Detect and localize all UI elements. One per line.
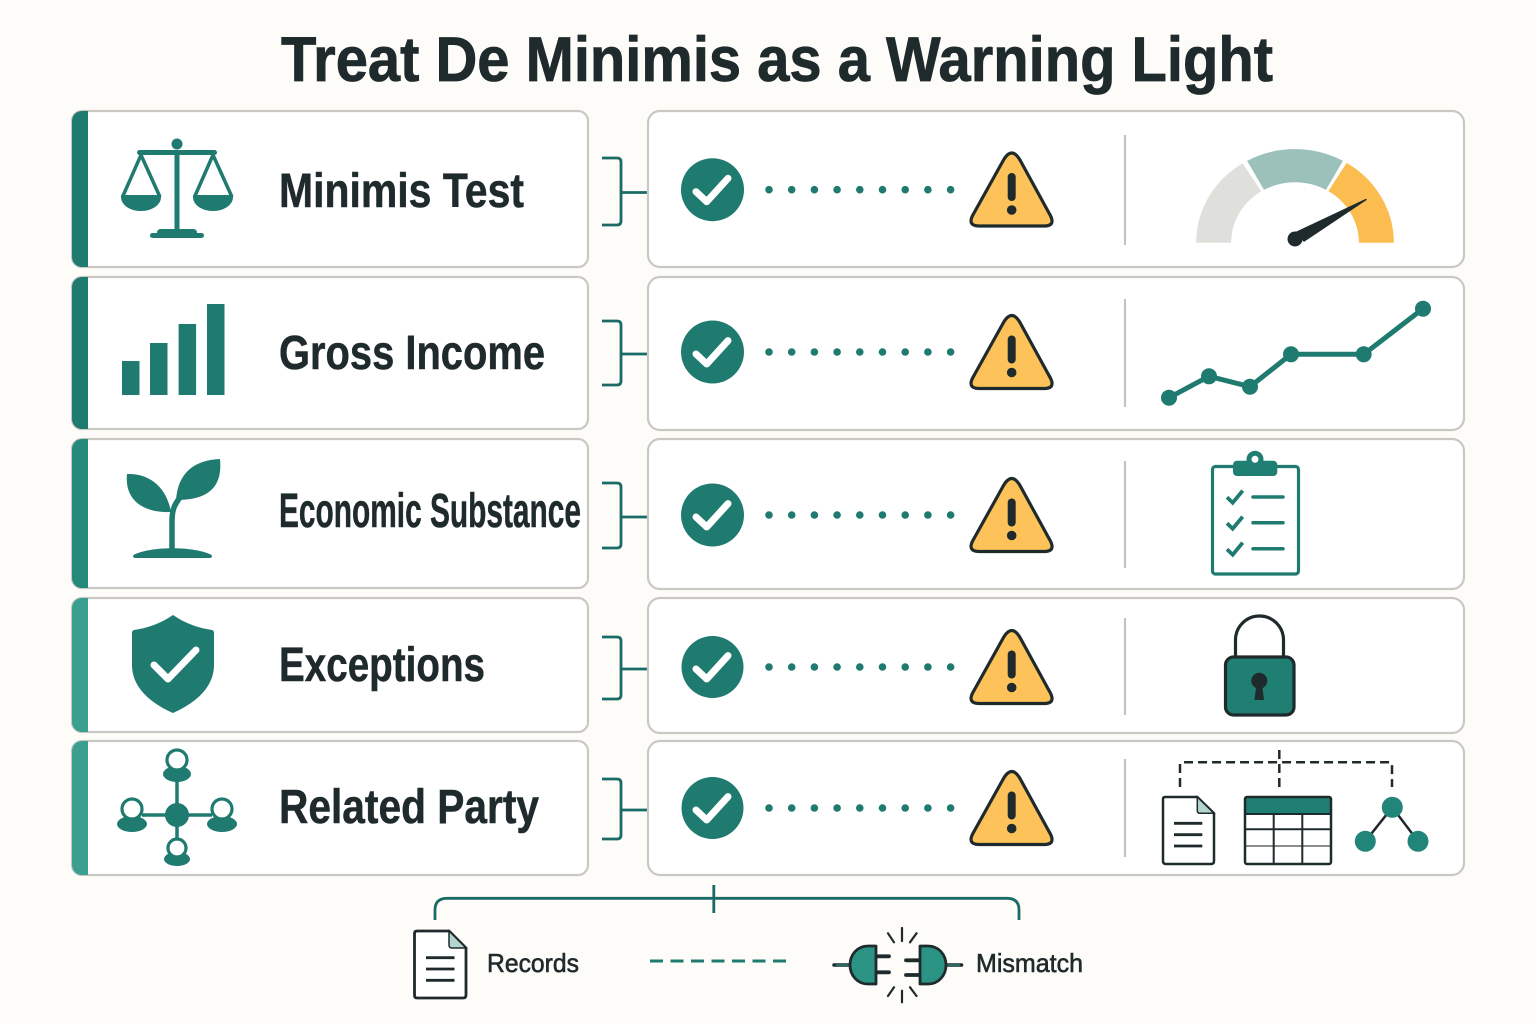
icon: document bbox=[1163, 797, 1214, 864]
icon: check badge bbox=[682, 636, 744, 698]
bracket: row 2 bbox=[602, 321, 648, 385]
bracket: row 5 bbox=[602, 779, 648, 839]
icon: table bbox=[1245, 797, 1331, 864]
icon: sprout bbox=[127, 459, 220, 558]
panel: Economic Substance label card bbox=[72, 439, 588, 588]
title: Treat De Minimis as a Warning Light bbox=[281, 25, 1273, 95]
icon: warning triangle bbox=[971, 153, 1052, 226]
label: Related Party: Related Party bbox=[279, 781, 539, 834]
panel: Related Party label card bbox=[72, 741, 588, 875]
panel: Minimis Test status card bbox=[648, 111, 1464, 267]
icon: warning triangle bbox=[971, 316, 1052, 388]
icon: hierarchy nodes bbox=[1355, 797, 1428, 852]
icon: warning triangle bbox=[971, 478, 1052, 552]
icon: check badge bbox=[681, 320, 744, 384]
dashed tree connector bbox=[1180, 750, 1392, 787]
panel: Related Party status card bbox=[648, 741, 1464, 875]
panel: Gross Income label card bbox=[72, 277, 588, 429]
panel: Minimis Test label card bbox=[72, 111, 588, 267]
panel: Exceptions status card bbox=[648, 598, 1464, 733]
dotted connector bbox=[765, 186, 954, 194]
icon: bar chart bbox=[122, 304, 224, 395]
icon: check badge bbox=[681, 158, 744, 221]
panel: Economic Substance status card bbox=[648, 439, 1464, 589]
icon: gauge bbox=[1214, 166, 1376, 246]
label: Records: Records bbox=[487, 948, 579, 978]
icon: clipboard checklist bbox=[1212, 451, 1298, 574]
bracket: row 3 bbox=[602, 483, 648, 548]
dashed link bbox=[650, 960, 788, 962]
label: Exceptions: Exceptions bbox=[279, 639, 485, 692]
icon: unplugged connector bbox=[834, 928, 962, 1002]
dotted connector bbox=[765, 804, 954, 812]
label: Mismatch: Mismatch bbox=[976, 948, 1083, 978]
icon: check badge bbox=[682, 777, 744, 839]
dotted connector bbox=[765, 663, 954, 671]
icon: padlock bbox=[1226, 616, 1294, 715]
panel: Exceptions label card bbox=[72, 598, 588, 732]
label: Economic Substance: Economic Substance bbox=[279, 485, 581, 538]
bottom bracket bbox=[435, 885, 1019, 920]
line chart bbox=[1161, 301, 1431, 406]
icon: warning triangle bbox=[971, 772, 1052, 844]
bracket: row 1 bbox=[602, 158, 648, 225]
icon: records document bbox=[414, 931, 466, 998]
dotted connector bbox=[765, 511, 954, 519]
icon: balance scale bbox=[121, 138, 233, 238]
icon: shield with check bbox=[132, 615, 214, 713]
panel: Gross Income status card bbox=[648, 277, 1464, 430]
label: Gross Income: Gross Income bbox=[279, 327, 545, 380]
bracket: row 4 bbox=[602, 637, 648, 699]
icon: people network bbox=[117, 750, 237, 866]
icon: check badge bbox=[681, 484, 744, 546]
icon: warning triangle bbox=[971, 630, 1052, 704]
dotted connector bbox=[765, 348, 954, 356]
label: Minimis Test: Minimis Test bbox=[279, 165, 524, 218]
